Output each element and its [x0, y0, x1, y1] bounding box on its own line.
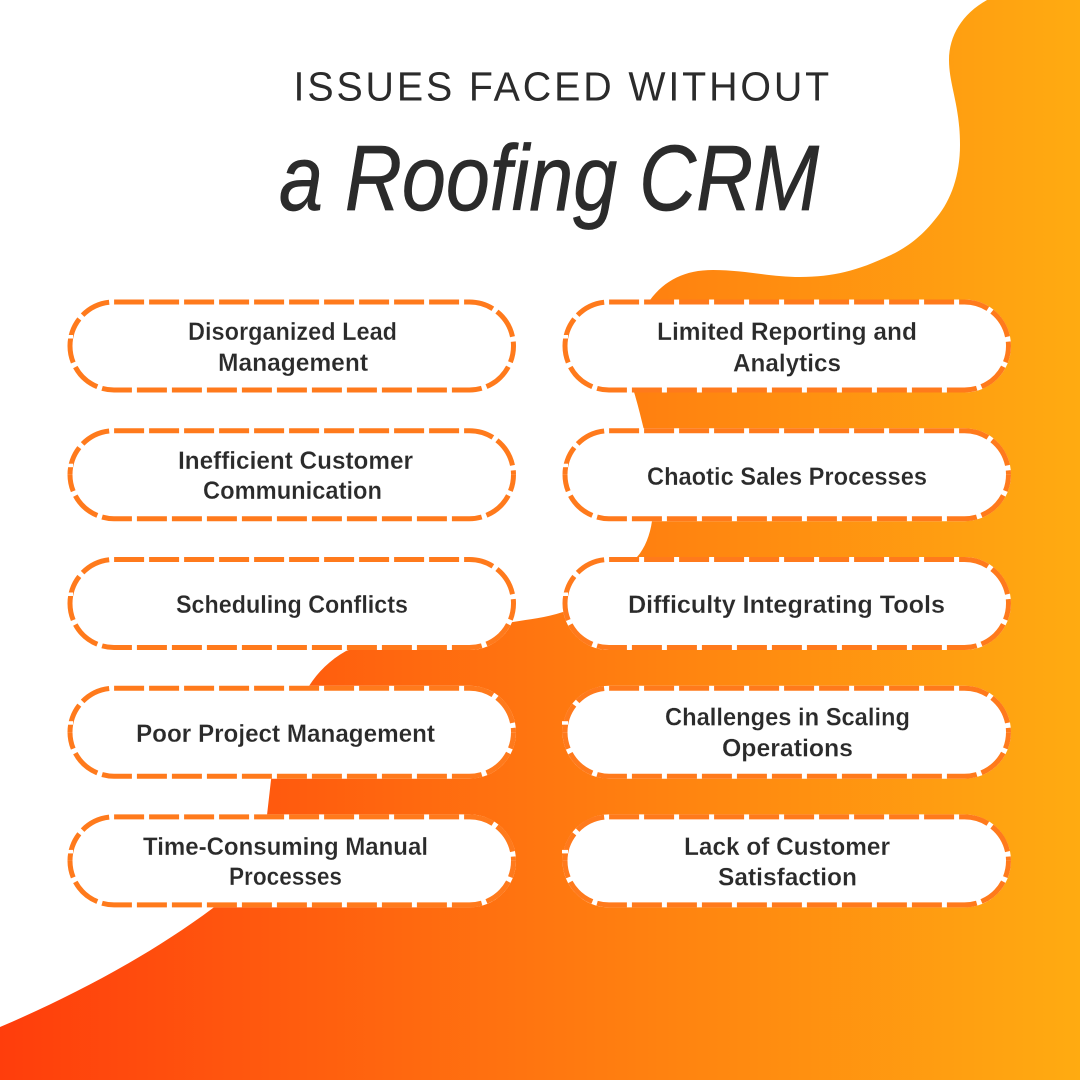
pill: Difficulty Integrating Tools: Difficulty Integrating Tools: [628, 591, 945, 619]
pill: Challenges in Scaling Operations: Operations: [722, 734, 853, 762]
pill: Lack of Customer Satisfaction: Lack of Customer: [684, 833, 890, 861]
pill: Challenges in Scaling Operations: [562, 686, 1011, 779]
pill: Poor Project Management: Poor Project Management: [136, 720, 436, 748]
pill: Inefficient Customer Communication: Inefficient Customer: [178, 447, 413, 475]
pill: Chaotic Sales Processes: Chaotic Sales Processes: [647, 463, 927, 491]
pill: Inefficient Customer Communication: Communication: [203, 477, 382, 505]
pill: Limited Reporting and Analytics: [562, 300, 1011, 392]
pill: Difficulty Integrating Tools: [562, 557, 1011, 650]
pill: Time-Consuming Manual Processes: Time-Consuming Manual: [143, 833, 428, 861]
pill: Time-Consuming Manual Processes: [67, 814, 516, 907]
pill: Limited Reporting and Analytics: Limited Reporting and: [657, 318, 917, 346]
pill: Scheduling Conflicts: [67, 557, 516, 650]
pill: Time-Consuming Manual Processes: Processes: [229, 863, 342, 891]
pill: Disorganized Lead Management: [67, 300, 516, 392]
title: [279, 64, 829, 230]
pill: Lack of Customer Satisfaction: Satisfaction: [718, 864, 857, 892]
pill: Chaotic Sales Processes: [562, 428, 1011, 521]
pill: Lack of Customer Satisfaction: [562, 814, 1011, 907]
pill: Challenges in Scaling Operations: Challenges in Scaling: [665, 704, 910, 732]
pill: Inefficient Customer Communication: [67, 428, 516, 521]
pill: Limited Reporting and Analytics: Analytics: [733, 350, 841, 378]
pill: Disorganized Lead Management: Management: [218, 349, 369, 377]
heading line: a Roofing CRM: a Roofing CRM: [279, 126, 819, 230]
pill: Scheduling Conflicts: Scheduling Conflicts: [176, 591, 408, 619]
pill: Disorganized Lead Management: Disorganized Lead: [188, 318, 397, 346]
pill: Poor Project Management: [67, 686, 516, 779]
heading line: issues faced without: ISSUES FACED WITHOUT: [294, 64, 829, 110]
